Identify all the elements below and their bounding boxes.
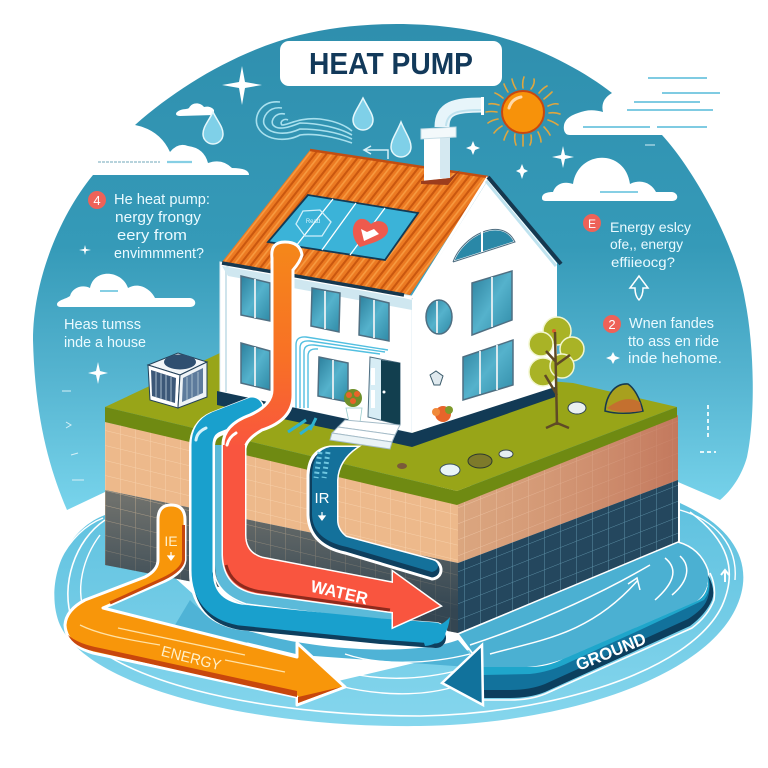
callout right: note 2: Wnen fandes	[629, 316, 714, 332]
heart glyph	[361, 229, 379, 241]
right wall gable	[412, 180, 557, 433]
tree	[529, 317, 584, 428]
small marks lower left	[62, 145, 655, 480]
door	[368, 357, 400, 425]
pipe inner band	[226, 445, 400, 618]
roof ridge	[310, 150, 488, 177]
arrow body	[483, 575, 710, 690]
water pool	[54, 503, 743, 726]
rocks	[397, 384, 643, 476]
pipe end hook	[420, 617, 450, 646]
cloud: top left small	[176, 103, 214, 116]
dark shading left	[105, 490, 458, 633]
eave	[222, 263, 404, 295]
callout left: question 4: He heat pump:	[114, 192, 210, 208]
brick shading right	[458, 415, 678, 563]
ground label: GROUND	[573, 629, 649, 675]
sparkle stars	[79, 66, 620, 384]
dashed line lower right	[700, 405, 716, 452]
pipe droplets	[316, 452, 328, 478]
water label: WATER	[309, 577, 370, 608]
callout left: house text	[64, 317, 146, 351]
left wall	[220, 262, 412, 433]
callout left: house text: inde a house	[64, 335, 146, 351]
water under pipes	[175, 600, 482, 668]
dark blue pipe	[308, 447, 441, 579]
small water outlets	[288, 418, 316, 434]
downpipe	[226, 262, 232, 392]
eave shadow	[222, 266, 412, 310]
swirl wind icon	[256, 102, 352, 143]
arrow bright strip	[483, 575, 709, 675]
wall lamp icon	[430, 371, 443, 385]
callout right: question E: effiieocg?	[611, 254, 675, 270]
sheet surface	[458, 542, 709, 668]
badge E	[583, 214, 601, 232]
arrow dark edge	[483, 575, 713, 698]
window mullions	[255, 277, 497, 399]
roof	[222, 150, 488, 295]
blue pipe	[196, 408, 450, 646]
energy arrow	[65, 505, 345, 705]
cloud: right	[542, 158, 677, 201]
grass edge	[105, 407, 677, 505]
arched window	[453, 227, 515, 262]
red/orange pipe	[223, 242, 440, 627]
callout left: question 4: nergy frongy	[115, 210, 202, 226]
highlight lines	[80, 625, 285, 672]
arrow head	[442, 645, 483, 705]
callout right: note 2: inde hehome.	[628, 351, 722, 367]
callout right: question E: ofe,, energy	[610, 236, 683, 252]
windows	[241, 271, 513, 402]
pipe lower red section	[223, 445, 440, 627]
cyan wall pipes	[296, 337, 388, 408]
arrow outline	[483, 573, 714, 700]
cloud: upper left	[50, 125, 249, 175]
callout left: house text: Heas tumss	[64, 317, 141, 333]
brick layer left	[105, 422, 458, 563]
pipe shadow	[226, 565, 390, 610]
dark layer right	[458, 480, 678, 633]
hexagon badge	[296, 210, 331, 236]
callout left: question 4	[88, 191, 210, 262]
small arrow	[168, 552, 174, 560]
pipe highlight	[196, 428, 206, 440]
sky background	[33, 24, 753, 510]
grass top	[105, 353, 677, 491]
callout right: note 2: tto ass en ride	[628, 334, 719, 350]
flower pot right	[432, 406, 453, 422]
gable trim	[412, 177, 488, 298]
ground arrow	[442, 542, 714, 705]
callout right: question E: E	[588, 217, 596, 231]
callout left: question 4: eery from	[117, 228, 187, 244]
title text: HEAT PUMP	[309, 46, 473, 81]
up arrow icon	[630, 276, 648, 300]
small arrow in sky	[364, 146, 388, 159]
sheet swirl	[470, 556, 687, 654]
brick layer right	[458, 415, 678, 563]
outdoor AC unit	[148, 353, 207, 408]
dark layer left	[105, 490, 458, 633]
badge 2	[603, 315, 621, 333]
label IR: IR	[314, 490, 330, 507]
ground block	[105, 353, 678, 633]
sun	[486, 77, 560, 146]
flower pot by door	[344, 389, 362, 422]
arrow inner shade	[110, 525, 184, 603]
small arrow	[319, 512, 325, 520]
callout right: question E	[583, 214, 691, 270]
heart icon	[353, 219, 388, 247]
badge text: Read	[306, 219, 320, 225]
chimney	[421, 97, 484, 185]
pipe highlight	[227, 433, 236, 445]
droplets	[203, 98, 411, 157]
badge 4	[88, 191, 106, 209]
house	[217, 97, 561, 449]
callout right: note 2	[603, 315, 722, 367]
foundation strip	[217, 387, 555, 447]
callout right: note 2: 2	[608, 317, 616, 332]
callout left: question 4: 4	[93, 193, 101, 208]
arrow head shade	[298, 687, 341, 703]
entry steps	[330, 420, 400, 449]
water ripple lines	[335, 654, 470, 694]
energy label: ENERGY	[159, 643, 223, 674]
cloud: top right with faint lines	[564, 78, 720, 135]
callout right: question E: Energy eslcy	[610, 219, 691, 235]
label IE: IE	[164, 533, 178, 549]
solar panel	[268, 195, 418, 260]
title pill	[280, 41, 502, 86]
cloud: left	[57, 274, 195, 307]
arrow lower shade	[68, 635, 297, 697]
callout left: question 4: envimmment?	[114, 246, 204, 262]
